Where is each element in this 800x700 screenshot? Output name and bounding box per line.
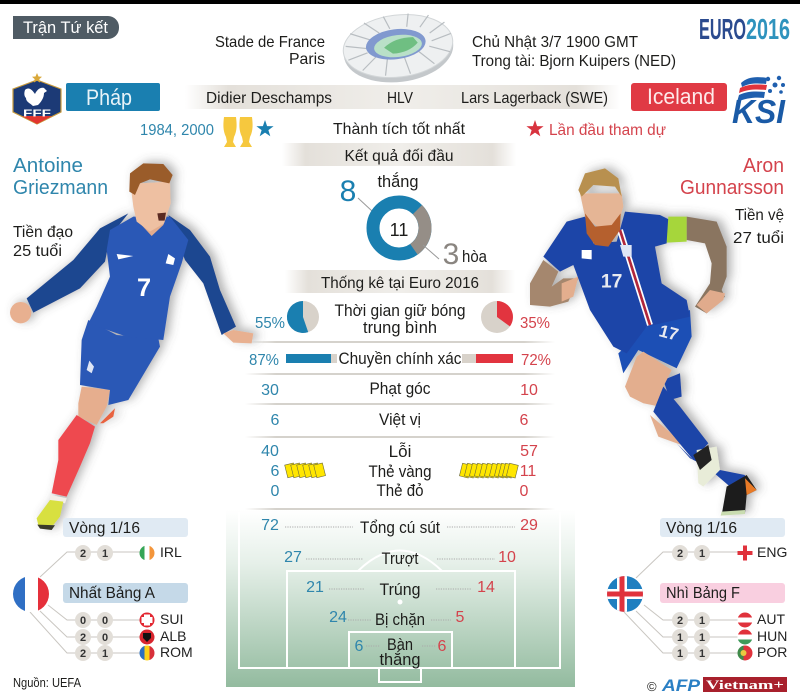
match row: Iceland vs England: 2 (677, 548, 683, 560)
label: Iceland round of 16: Vòng 1/16 (666, 520, 737, 537)
panel: shots on football pitch (226, 510, 575, 687)
stat: offsides: 6 (520, 412, 529, 429)
match row: France vs Ireland: 1 (102, 548, 108, 560)
panel: shots on football pitch: 24 (329, 609, 347, 626)
match row: Iceland vs Portugal: POR (757, 644, 787, 660)
credit logo: AFP Vietnam+: Vietnam+ (706, 677, 784, 692)
stat: corners: 30 (261, 382, 279, 399)
icon: trophies (223, 117, 253, 147)
match row: Iceland vs Hungary: 1 (677, 632, 683, 644)
player details: Gunnarsson: 27 tuổi (733, 229, 784, 247)
stat: offsides (271, 410, 529, 429)
player: Griezmann photo illustration: 7 (137, 274, 151, 302)
stat: fouls and cards: Lỗi (389, 442, 411, 461)
stat: fouls and cards: 57 (520, 443, 538, 460)
match row: Iceland vs England (672, 544, 787, 561)
title pill: Trận Tứ kết (23, 18, 108, 37)
panel: shots on football pitch: 21 (306, 579, 324, 596)
match row: France vs Switzerland (75, 611, 183, 628)
team label: France (66, 83, 160, 111)
match row: Iceland vs Hungary: 1 (699, 632, 705, 644)
label: Iceland group: Nhì Bảng F (666, 585, 740, 602)
panel: shots on football pitch: 29 (520, 517, 538, 534)
match row: France vs Albania: 0 (102, 632, 108, 644)
heading: head to head (282, 143, 516, 166)
match row: Iceland vs Austria (672, 611, 785, 628)
credit logo: AFP Vietnam+ (647, 676, 787, 695)
stat: fouls and cards: 11 (520, 463, 536, 480)
match row: France vs Switzerland: 0 (80, 615, 86, 627)
icon: stadium (340, 9, 457, 88)
label: France round of 16 (63, 518, 188, 537)
coaches band: Didier Deschamps (206, 90, 332, 107)
match row: Iceland vs Portugal: 1 (677, 648, 683, 660)
stat: fouls and cards: Thẻ đỏ (376, 481, 424, 500)
stat: offsides: Việt vị (379, 410, 421, 429)
match info (472, 34, 676, 70)
logo: KSI (732, 76, 786, 130)
player: Gunnarsson photo illustration: 17 (657, 320, 681, 345)
player name: Gunnarsson (680, 155, 784, 199)
match row: France vs Switzerland: 0 (102, 615, 108, 627)
stat: fouls and cards: 0 (520, 483, 529, 500)
credit logo: AFP Vietnam+: © (647, 679, 657, 694)
title pill (13, 16, 119, 39)
player: Gunnarsson photo illustration (530, 168, 757, 516)
stat: fouls and cards: 40 (261, 443, 279, 460)
stat: fouls and cards: 0 (271, 483, 280, 500)
stat: fouls and cards: Thẻ vàng (368, 462, 432, 481)
pitch markings (239, 512, 560, 682)
panel: shots on football pitch: 27 (284, 549, 302, 566)
team label: France: Pháp (86, 85, 132, 110)
panel: shots on football pitch: 6 (438, 638, 447, 655)
stat: offsides: 6 (271, 412, 280, 429)
match row: Iceland vs Hungary (672, 628, 787, 646)
match row: France vs Ireland (75, 544, 182, 561)
match row: France vs Romania: 1 (102, 648, 108, 660)
best achievement row (140, 117, 666, 147)
panel: shots on football pitch: 72 (261, 517, 279, 534)
match row: Iceland vs Austria: 2 (677, 615, 683, 627)
panel: Iceland route (607, 518, 787, 661)
player details: Griezmann: 25 tuổi (13, 242, 62, 260)
icon: yellow cards France (285, 463, 326, 478)
stat: possession (255, 301, 550, 337)
logo: France FFF badge: FFF (23, 108, 51, 120)
match row: Iceland vs Austria: 1 (699, 615, 705, 627)
panel: shots on football pitch: 14 (477, 579, 495, 596)
match row: Iceland vs Portugal: 1 (699, 648, 705, 660)
panel: France route (13, 518, 193, 661)
stat: corners (261, 379, 538, 399)
match row: France vs Switzerland: SUI (160, 611, 183, 627)
stat: possession: 35% (520, 315, 550, 332)
donut chart: head to head (340, 172, 487, 271)
player name: Gunnarsson: Gunnarsson (680, 177, 784, 199)
coaches band: Lars Lagerback (SWE) (461, 90, 608, 107)
best achievement row: Lần đầu tham dự (549, 122, 666, 139)
match row: France vs Romania (75, 644, 193, 661)
stat: pass accuracy (249, 349, 551, 369)
stat: possession: Thời gian giữ bóng (334, 301, 466, 320)
stat: corners: Phạt góc (370, 379, 431, 398)
icon: yellow cards Iceland (459, 463, 518, 478)
logo: Euro 2016: EURO (699, 14, 746, 46)
team label: Iceland: Iceland (647, 84, 715, 109)
panel: shots on football pitch: Tổng cú sút (360, 518, 440, 537)
logo: KSI: KSI (732, 93, 786, 130)
coaches band (185, 85, 620, 109)
panel: shots on football pitch: Trúng (380, 580, 420, 599)
stat: possession: trung bình (363, 318, 437, 337)
match row: Iceland vs Hungary: HUN (757, 628, 787, 644)
label: Iceland group (660, 583, 785, 603)
coaches band: HLV (387, 90, 413, 107)
match row: France vs Albania: 2 (80, 632, 86, 644)
player details: Griezmann: Tiền đạo (13, 224, 73, 241)
panel: shots on football pitch: Bị chặn (375, 610, 425, 629)
match row: Iceland vs Portugal (672, 644, 787, 661)
player: Gunnarsson photo illustration: 17 (601, 271, 622, 292)
panel: shots on football pitch: thắng (380, 650, 420, 669)
match row: France vs Romania: ROM (160, 644, 193, 660)
panel: shots on football pitch: 5 (456, 609, 465, 626)
flag: Iceland (607, 576, 643, 612)
stat: possession: 55% (255, 315, 285, 332)
match row: France vs Romania: 2 (80, 648, 86, 660)
label: France group (63, 583, 188, 603)
player details: Gunnarsson (733, 207, 784, 247)
label: France round of 16: Vòng 1/16 (69, 520, 140, 537)
match row: Iceland vs England: ENG (757, 544, 787, 560)
panel: shots on football pitch: Trượt (382, 549, 419, 568)
player details: Griezmann (13, 224, 73, 260)
flag: France (13, 576, 50, 612)
panel: shots on football pitch: 10 (498, 549, 516, 566)
match info: Trong tài: Bjorn Kuipers (NED) (472, 53, 676, 70)
heading: Euro stats: Thống kê tại Euro 2016 (321, 275, 479, 292)
venue text (215, 34, 325, 68)
match info: Chủ Nhật 3/7 1900 GMT (472, 34, 638, 51)
donut chart: head to head: 8 (340, 175, 356, 208)
player name: Griezmann: Griezmann (13, 177, 108, 199)
player: Griezmann photo illustration (10, 163, 253, 530)
player name: Griezmann: Antoine (13, 155, 83, 177)
heading: head to head: Kết quả đối đầu (344, 148, 454, 165)
logo: France FFF badge (13, 73, 61, 124)
match row: France vs Ireland: IRL (160, 544, 182, 560)
label: Iceland round of 16 (660, 518, 785, 537)
source note: Nguồn: UEFA (13, 675, 81, 690)
stat: pass accuracy: 87% (249, 352, 279, 369)
donut chart: head to head: thắng (378, 172, 418, 191)
panel: shots on football pitch: 6 (355, 638, 364, 655)
match row: France vs Albania: ALB (160, 628, 186, 644)
venue text: Stade de France (215, 34, 325, 51)
match row: France vs Albania (75, 628, 186, 645)
player name: Gunnarsson: Aron (743, 155, 784, 177)
stat: corners: 10 (520, 382, 538, 399)
match row: France vs Ireland: 2 (80, 548, 86, 560)
stat: fouls and cards: 6 (271, 463, 280, 480)
stat: pass accuracy: 72% (521, 352, 551, 369)
player name: Griezmann (13, 155, 108, 199)
stat: fouls and cards (261, 442, 538, 500)
heading: Euro stats (285, 270, 515, 293)
credit logo: AFP Vietnam+: AFP (661, 676, 701, 695)
panel: shots on football pitch: Bàn (387, 635, 413, 654)
donut chart: head to head: 3 (443, 238, 459, 271)
stat: pass accuracy: Chuyền chính xác (338, 349, 462, 368)
best achievement row: 1984, 2000 (140, 122, 214, 139)
match row: Iceland vs England: 1 (699, 548, 705, 560)
player details: Gunnarsson: Tiền vệ (735, 207, 784, 224)
match row: Iceland vs Austria: AUT (757, 611, 785, 627)
best achievement row: Thành tích tốt nhất (333, 121, 466, 138)
label: France group: Nhất Bảng A (69, 585, 155, 602)
donut chart: head to head: hòa (462, 247, 487, 266)
venue text: Paris (289, 51, 325, 68)
team label: Iceland (631, 83, 727, 111)
donut chart: head to head: 11 (390, 220, 408, 240)
